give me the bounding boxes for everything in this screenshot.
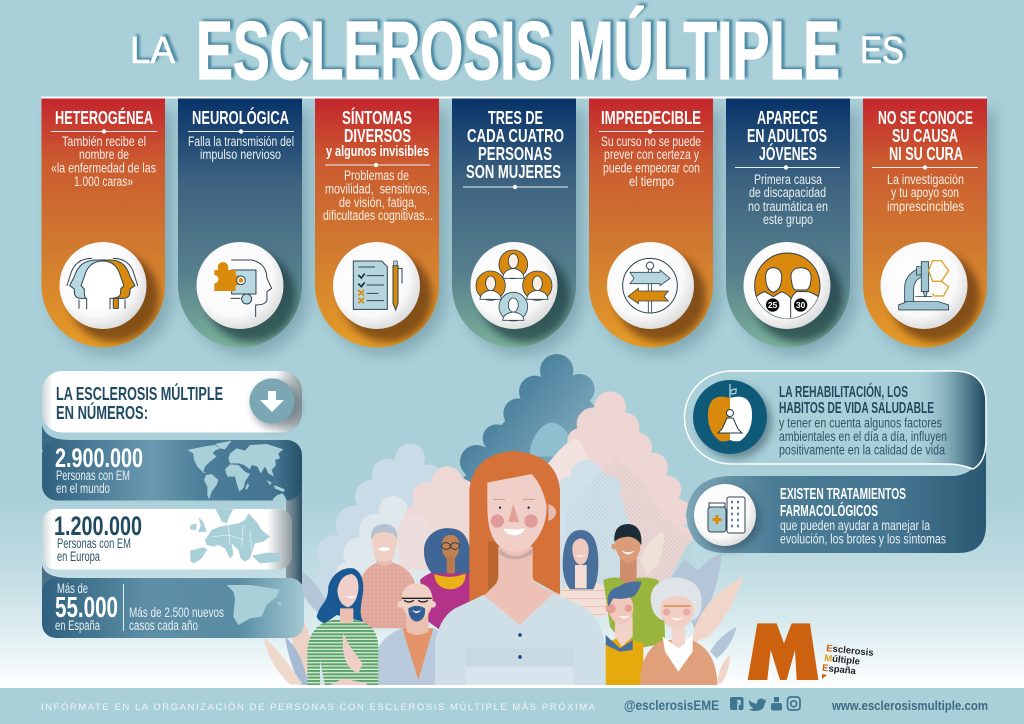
panel: síntomas diversos: dificultades cognitivas... (323, 208, 433, 223)
band: europe: en Europa (57, 549, 100, 564)
panel: heterogénea: 1.000 caras» (74, 174, 133, 189)
panel: neurológica: impulso nervioso (200, 147, 281, 162)
panel: no se conoce su causa: imprescincibles (887, 199, 964, 214)
heading text (56, 383, 223, 423)
panel: tratamientos background (686, 450, 986, 553)
panel: no se conoce su causa: La investigación (887, 172, 964, 187)
panel: neurológica: NEUROLÓGICA (192, 107, 289, 128)
panel: síntomas diversos: y algunos invisibles (326, 143, 429, 160)
cloud: left pink (405, 466, 473, 563)
icon: medication (694, 484, 760, 550)
leaves: right (640, 532, 743, 683)
person: blue hair man (606, 581, 643, 685)
band: world: Personas con EM (56, 468, 130, 483)
panel: síntomas diversos: DIVERSOS (344, 126, 411, 146)
logo: esclerosis múltiple españa (748, 623, 874, 680)
band: world (42, 440, 302, 501)
band: europe: Personas con EM (57, 536, 131, 551)
cloud: left small pink (397, 513, 440, 570)
panel: aparece en adultos jóvenes: EN ADULTOS (747, 126, 827, 146)
panel: síntomas diversos: SÍNTOMAS (342, 107, 412, 128)
connector: europe band to spain band (42, 560, 70, 590)
panel: no se conoce su causa: SU CAUSA (892, 126, 958, 146)
person: bald man (368, 583, 443, 685)
band: spain: Más de 2.500 nuevos (129, 605, 224, 620)
panel: la esclerosis múltiple en números (42, 371, 304, 638)
text: rehabilitación: LA REHABILITACIÓN, LOS (779, 382, 908, 401)
title: LA (130, 30, 176, 72)
panel: rehabilitación outline (684, 371, 986, 469)
cloud: light blue hole (530, 423, 575, 457)
panel: tres de cada cuatro: CADA CUATRO (467, 126, 564, 146)
cloud: right pink (562, 391, 693, 583)
panel: impredecible (589, 98, 713, 347)
person: long blue hair woman (561, 530, 607, 617)
text: rehabilitación: ambientales en el día a día, influyen (779, 429, 947, 444)
panel: aparece en adultos jóvenes: este grupo (763, 212, 813, 227)
band: spain: Más de (57, 581, 88, 596)
person: main woman (435, 451, 606, 685)
panel: impredecible: IMPREDECIBLE (601, 108, 701, 128)
icon: adults 25 and 30: 25 (768, 300, 778, 310)
icon: instagram (788, 697, 800, 710)
panel: aparece en adultos jóvenes: de discapacidad (749, 185, 826, 200)
text: rehabilitación: y tener en cuenta algunos factores (779, 416, 942, 430)
icon: adults 25 and 30: 30 (796, 300, 806, 310)
panel: aparece en adultos jóvenes: JÓVENES (759, 143, 817, 164)
band: spain (42, 578, 304, 638)
icon: checklist and pen (353, 261, 402, 310)
panel: impredecible: prever con certeza y (604, 147, 699, 162)
text: rehabilitación (779, 382, 947, 458)
band: europe: 1.200.000 (54, 511, 142, 541)
text: rehabilitación: HABITOS DE VIDA SALUDABLE (779, 400, 934, 417)
band: europe (42, 509, 292, 570)
top rule (41, 96, 987, 98)
panel: heterogénea (42, 98, 165, 347)
panel: heterogénea: HETEROGÉNEA (55, 107, 153, 128)
icon: puzzle in head (214, 260, 272, 317)
text: tratamientos: evolución, los brotes y los síntomas (780, 532, 946, 546)
icon: youtube (771, 697, 782, 710)
map: europe (190, 509, 280, 563)
cloud: left grey blue (316, 443, 473, 610)
panel: heterogénea: «la enfermedad de las (51, 160, 156, 176)
icon: twitter (749, 698, 766, 711)
heading text: LA ESCLEROSIS MÚLTIPLE (56, 383, 223, 404)
map: world (187, 441, 287, 501)
band: world: en el mundo (56, 481, 110, 496)
panel: tres de cada cuatro: SON MUJERES (466, 162, 561, 182)
icon: signpost (623, 258, 677, 313)
band: spain: en España (55, 618, 100, 633)
icon: down arrow button (250, 378, 300, 429)
panel: aparece en adultos jóvenes (726, 98, 850, 347)
panel: tres de cada cuatro (452, 98, 576, 347)
halftone texture (563, 458, 698, 590)
person: green shirt man (603, 524, 665, 650)
footer: INFÓRMATE EN LA ORGANIZACIÓN DE PERSONAS CON ESCLEROSIS MÚLTIPLE MÁS PRÓXIMA (41, 702, 596, 713)
icon: microscope and molecules (899, 261, 949, 310)
icon: adults 25 and 30 (753, 253, 822, 322)
panel: no se conoce su causa (863, 98, 987, 347)
panel: rehabilitación and tratamientos (684, 371, 986, 553)
panel: heterogénea: También recibe el (62, 134, 146, 149)
person: older man (360, 524, 415, 628)
text: tratamientos (780, 486, 946, 546)
cloud: left pale (335, 496, 447, 610)
logo: esclerosis múltiple españa: Esclerosis (826, 643, 874, 659)
title: ES (860, 30, 904, 72)
panel: impredecible: Su curso no se puede (601, 134, 701, 149)
heading text: EN NÚMEROS: (56, 402, 148, 423)
person: older woman (640, 577, 717, 685)
panel: aparece en adultos jóvenes: no traumática en (748, 199, 828, 214)
band: world: 2.900.000 (55, 443, 143, 473)
connector: world band to europe band (286, 488, 302, 585)
icon: apple with meditating figure (693, 380, 772, 459)
cloud: dark blue (460, 354, 596, 493)
text: tratamientos: que pueden ayudar a manejar la (780, 518, 930, 533)
text: tratamientos: EXISTEN TRATAMIENTOS (780, 486, 906, 503)
panel: tres de cada cuatro: TRES DE (488, 108, 543, 128)
panel: síntomas diversos: Problemas de (344, 168, 409, 183)
panel: no se conoce su causa: NO SE CONOCE (878, 108, 973, 128)
footer (0, 688, 1024, 724)
person: curly woman (420, 528, 471, 630)
panel: síntomas diversos: de visión, fatiga, (339, 195, 417, 210)
icon: facebook (730, 697, 744, 710)
panel: no se conoce su causa: y tu apoyo son (891, 185, 959, 200)
panel: heterogénea: nombre de (79, 147, 129, 162)
panel: impredecible: puede empeorar con (603, 160, 700, 176)
map: spain (227, 585, 282, 625)
panel: síntomas diversos: movilidad, sensitivos, (325, 182, 430, 196)
illustration: clouds and people (263, 354, 743, 685)
connector: header to world band (42, 420, 70, 450)
text: tratamientos: FARMACOLÓGICOS (780, 501, 878, 520)
text: rehabilitación: positivamente en la calidad de vida (779, 442, 945, 458)
panel shadows (50, 110, 995, 355)
panel: aparece en adultos jóvenes: APARECE (757, 108, 818, 128)
panel: tres de cada cuatro: PERSONAS (478, 144, 552, 164)
cloud: pale pink left side of right group (547, 438, 593, 483)
icon: heads (67, 258, 138, 309)
panel: síntomas diversos (315, 98, 439, 347)
band: spain: casos cada año (129, 618, 198, 633)
panel: neurológica (178, 98, 302, 347)
cloud: right light blue (556, 460, 633, 590)
footer: @esclerosisEME (624, 697, 719, 713)
panel: neurológica: Falla la transmisión del (188, 134, 294, 149)
logo: esclerosis múltiple españa: España (822, 663, 857, 677)
icon: four people (476, 250, 552, 321)
panel: impredecible: el tiempo (629, 174, 674, 189)
person: left woman (307, 568, 378, 685)
leaves: left (263, 565, 327, 685)
heading band (42, 371, 302, 432)
footer: www.esclerosismultiple.com (831, 698, 988, 713)
logo: esclerosis múltiple españa: Múltiple (824, 653, 861, 668)
panel: no se conoce su causa: NI SU CURA (889, 144, 963, 164)
panel: aparece en adultos jóvenes: Primera causa (754, 172, 822, 187)
band: spain: 55.000 (55, 592, 118, 624)
